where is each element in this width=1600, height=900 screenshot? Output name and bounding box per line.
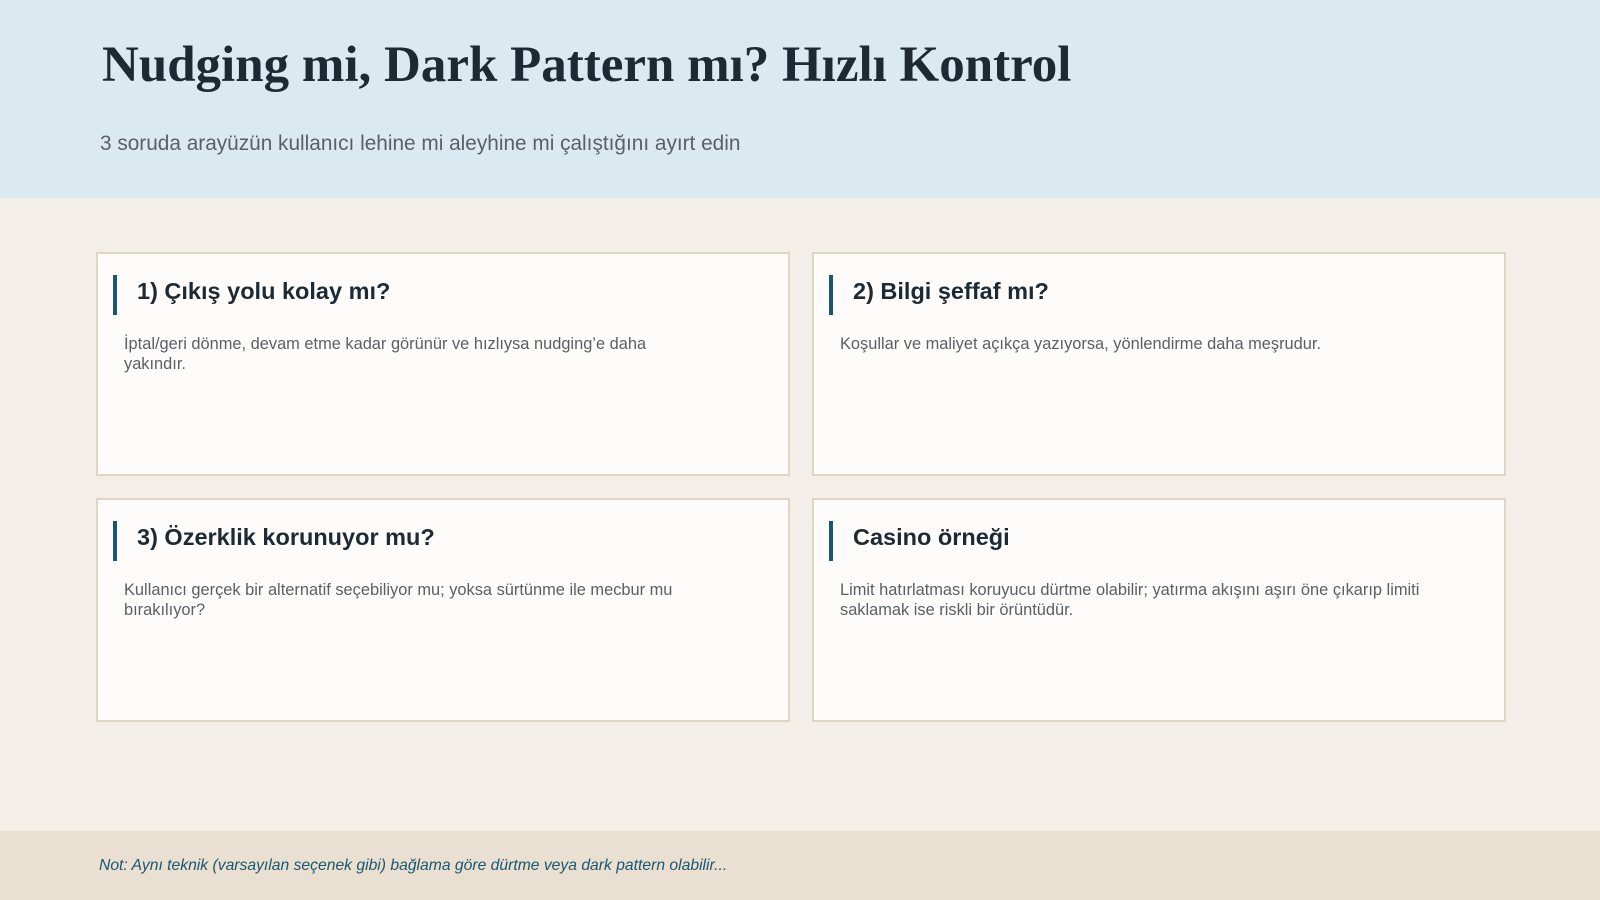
accent bar (113, 275, 117, 315)
panel: casino example (812, 498, 1506, 722)
heading: 1) Çıkış yolu kolay mı? (137, 278, 390, 304)
footer note: Not: Aynı teknik (varsayılan seçenek gibi) bağlama göre dürtme veya dark pattern olabilir... (99, 857, 727, 874)
heading: 2) Bilgi şeffaf mı? (853, 278, 1049, 304)
body text: İptal/geri dönme, devam etme kadar görünür ve hızlıysa nudging’e daha yakındır. (124, 335, 646, 373)
header band (0, 0, 1600, 198)
panel: question 3 (96, 498, 790, 722)
heading: 3) Özerklik korunuyor mu? (137, 524, 435, 550)
heading: Casino örneği (853, 524, 1010, 550)
body text: Kullanıcı gerçek bir alternatif seçebiliyor mu; yoksa sürtünme ile mecbur mu bırakılıyor? (124, 581, 672, 619)
body text: Koşullar ve maliyet açıkça yazıyorsa, yönlendirme daha meşrudur. (840, 335, 1321, 353)
panel: question 2 (812, 252, 1506, 476)
body text: Limit hatırlatması koruyucu dürtme olabilir; yatırma akışını aşırı öne çıkarıp limiti saklamak ise riskli bir örüntüdür. (840, 581, 1419, 619)
title: Nudging mi, Dark Pattern mı? Hızlı Kontrol (102, 37, 1071, 93)
accent bar (113, 521, 117, 561)
accent bar (829, 521, 833, 561)
accent bar (829, 275, 833, 315)
panel: question 1 (96, 252, 790, 476)
footer band (0, 831, 1600, 900)
subtitle: 3 soruda arayüzün kullanıcı lehine mi aleyhine mi çalıştığını ayırt edin (100, 132, 740, 155)
